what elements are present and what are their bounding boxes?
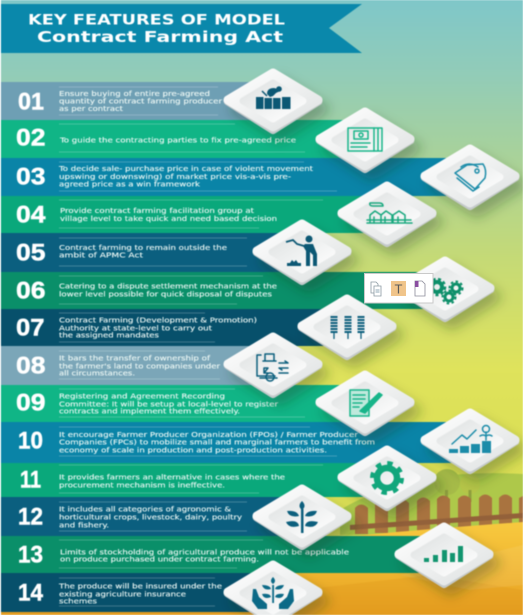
number 11: 11 bbox=[20, 466, 41, 494]
text 12: It includes all categories of agronomic & bbox=[59, 504, 231, 514]
text 09 bbox=[59, 392, 279, 416]
diamond 05: farmer with tool bbox=[257, 224, 347, 280]
title line 2: Contract Farming Act bbox=[37, 28, 284, 46]
number 03: 03 bbox=[16, 164, 46, 190]
bar 03 bbox=[1, 158, 470, 196]
icon: copy bbox=[371, 282, 381, 296]
text 13: Limits of stockholding of agricultural produce will not be applicable bbox=[60, 548, 350, 556]
text 01 bbox=[59, 89, 223, 113]
text 08: all circumstances. bbox=[59, 368, 135, 378]
text 11: procurement mechanism is ineffective. bbox=[59, 480, 225, 490]
number 14: 14 bbox=[18, 580, 43, 606]
number 01: 01 bbox=[18, 88, 44, 116]
text 01: as per contract bbox=[59, 104, 123, 113]
text 11: It provides farmers an alternative in cases where the bbox=[59, 472, 286, 482]
bar 07 bbox=[1, 309, 347, 346]
diamond 11: gear bbox=[342, 450, 432, 506]
text 06: Catering to a dispute settlement mechanism at the bbox=[59, 282, 278, 290]
diamond 03: price tag bbox=[425, 149, 515, 206]
text 09: Committee: It will be setup at local-level to register bbox=[59, 400, 279, 408]
number 09: 09 bbox=[16, 390, 46, 416]
text 09: contracts and implement them effectively. bbox=[59, 406, 240, 416]
text 08: It bars the transfer of ownership of bbox=[59, 354, 210, 362]
text 10: It encourage Farmer Producer Organization (FPOs) / Farmer Producer bbox=[59, 430, 359, 439]
bar 09 bbox=[1, 385, 365, 422]
diamond 02: document bbox=[320, 112, 410, 168]
text 07: Contract Farming (Development & Promotion) bbox=[59, 316, 257, 324]
field facets bbox=[280, 545, 523, 615]
text 01: Ensure buying of entire pre-agreed bbox=[59, 89, 210, 98]
bar 08 bbox=[1, 346, 273, 385]
diamond 04: farm buildings bbox=[342, 186, 432, 242]
text 11 bbox=[59, 472, 286, 490]
text 05: Contract farming to remain outside the bbox=[59, 243, 228, 252]
bar 06 bbox=[1, 272, 445, 309]
text 13 bbox=[60, 548, 350, 564]
bar 01 bbox=[1, 82, 273, 120]
number 05: 05 bbox=[16, 240, 46, 266]
text 03: upswing or downswing) of market price vis-a-vis pre- bbox=[59, 172, 291, 181]
number 04: 04 bbox=[16, 202, 46, 228]
text 08 bbox=[59, 354, 221, 378]
text 07: the assigned mandates bbox=[59, 330, 159, 340]
number 12: 12 bbox=[18, 504, 43, 530]
bar 04 bbox=[1, 196, 387, 233]
diamond 12: plant leaves bbox=[257, 489, 347, 546]
text 10 bbox=[59, 430, 375, 454]
text 05 bbox=[59, 243, 228, 260]
text 09: Registering and Agreement Recording bbox=[59, 392, 225, 400]
diamond 14: hands holding plant bbox=[228, 565, 318, 615]
text 05: ambit of APMC Act bbox=[59, 250, 143, 260]
title ribbon bbox=[1, 4, 362, 53]
diamond 07: wheat stalks bbox=[302, 299, 392, 356]
tree right bbox=[460, 474, 480, 502]
text 10: Companies (FPCs) to mobilize small and marginal farmers to benefit from bbox=[59, 438, 375, 446]
green meadow bbox=[340, 473, 523, 535]
number 13: 13 bbox=[18, 542, 43, 568]
diamond 08: bank and exchange bbox=[228, 337, 318, 394]
bar 11 bbox=[1, 463, 387, 497]
icon: text: T bbox=[395, 282, 403, 296]
text 03 bbox=[58, 164, 313, 188]
diamond 01: farmer over bars bbox=[228, 73, 318, 130]
bar 13 bbox=[1, 536, 445, 573]
number 07: 07 bbox=[16, 314, 44, 342]
text 03: agreed price as a win framework bbox=[59, 180, 201, 188]
title line 1: KEY FEATURES OF MODEL bbox=[28, 12, 285, 28]
text 03: To decide sale- purchase price in case of violent movement bbox=[58, 164, 313, 173]
text 01: quantity of contract farming producer bbox=[59, 97, 223, 106]
text 12 bbox=[59, 504, 243, 530]
diamond 13: bar chart bbox=[399, 527, 489, 584]
text 07 bbox=[59, 316, 257, 340]
diamond 09: contract with pen bbox=[320, 375, 410, 432]
text 02: To guide the contracting parties to fix pre-agreed price bbox=[59, 136, 297, 144]
text 13: on produce purchased under contract farming. bbox=[60, 554, 259, 564]
text 10: economy of scale in production and post-production activities. bbox=[59, 446, 327, 454]
bar 12 bbox=[1, 497, 302, 536]
diamond 06: gears bbox=[400, 261, 490, 318]
text 04: Provide contract farming facilitation group at bbox=[60, 206, 254, 215]
panel: feature bars bbox=[1, 82, 470, 612]
text 14: The produce will be insured under the bbox=[58, 582, 223, 590]
text 07: Authority at state-level to carry out bbox=[59, 324, 212, 332]
wooden fence bbox=[350, 494, 523, 534]
text 14: existing agriculture insurance bbox=[59, 590, 187, 598]
tree left bbox=[434, 469, 460, 504]
numbers bbox=[16, 88, 46, 606]
text 04 bbox=[60, 206, 277, 223]
text 12: horticultural crops, livestock, dairy, poultry bbox=[59, 512, 243, 522]
number 06: 06 bbox=[16, 278, 46, 304]
orange field bbox=[1, 522, 523, 615]
bar 02 bbox=[1, 120, 365, 158]
number 10: 10 bbox=[18, 428, 43, 454]
text 08: the farmer's land to companies under bbox=[59, 362, 221, 370]
text 04: village level to take quick and need based decision bbox=[60, 214, 277, 223]
diamond 10: growth chart with plant bbox=[425, 413, 515, 470]
text 14 bbox=[58, 582, 223, 606]
text 06: lower level possible for quick disposal of disputes bbox=[59, 290, 272, 298]
text 12: and fishery. bbox=[59, 520, 109, 530]
text 14: schemes bbox=[59, 596, 97, 606]
number 08: 08 bbox=[16, 352, 46, 380]
bar 14 bbox=[1, 573, 273, 612]
icon: page bbox=[415, 281, 425, 296]
bar 10 bbox=[1, 422, 470, 463]
text 06 bbox=[59, 282, 278, 298]
number 02: 02 bbox=[16, 124, 46, 152]
bar 05 bbox=[1, 233, 302, 272]
